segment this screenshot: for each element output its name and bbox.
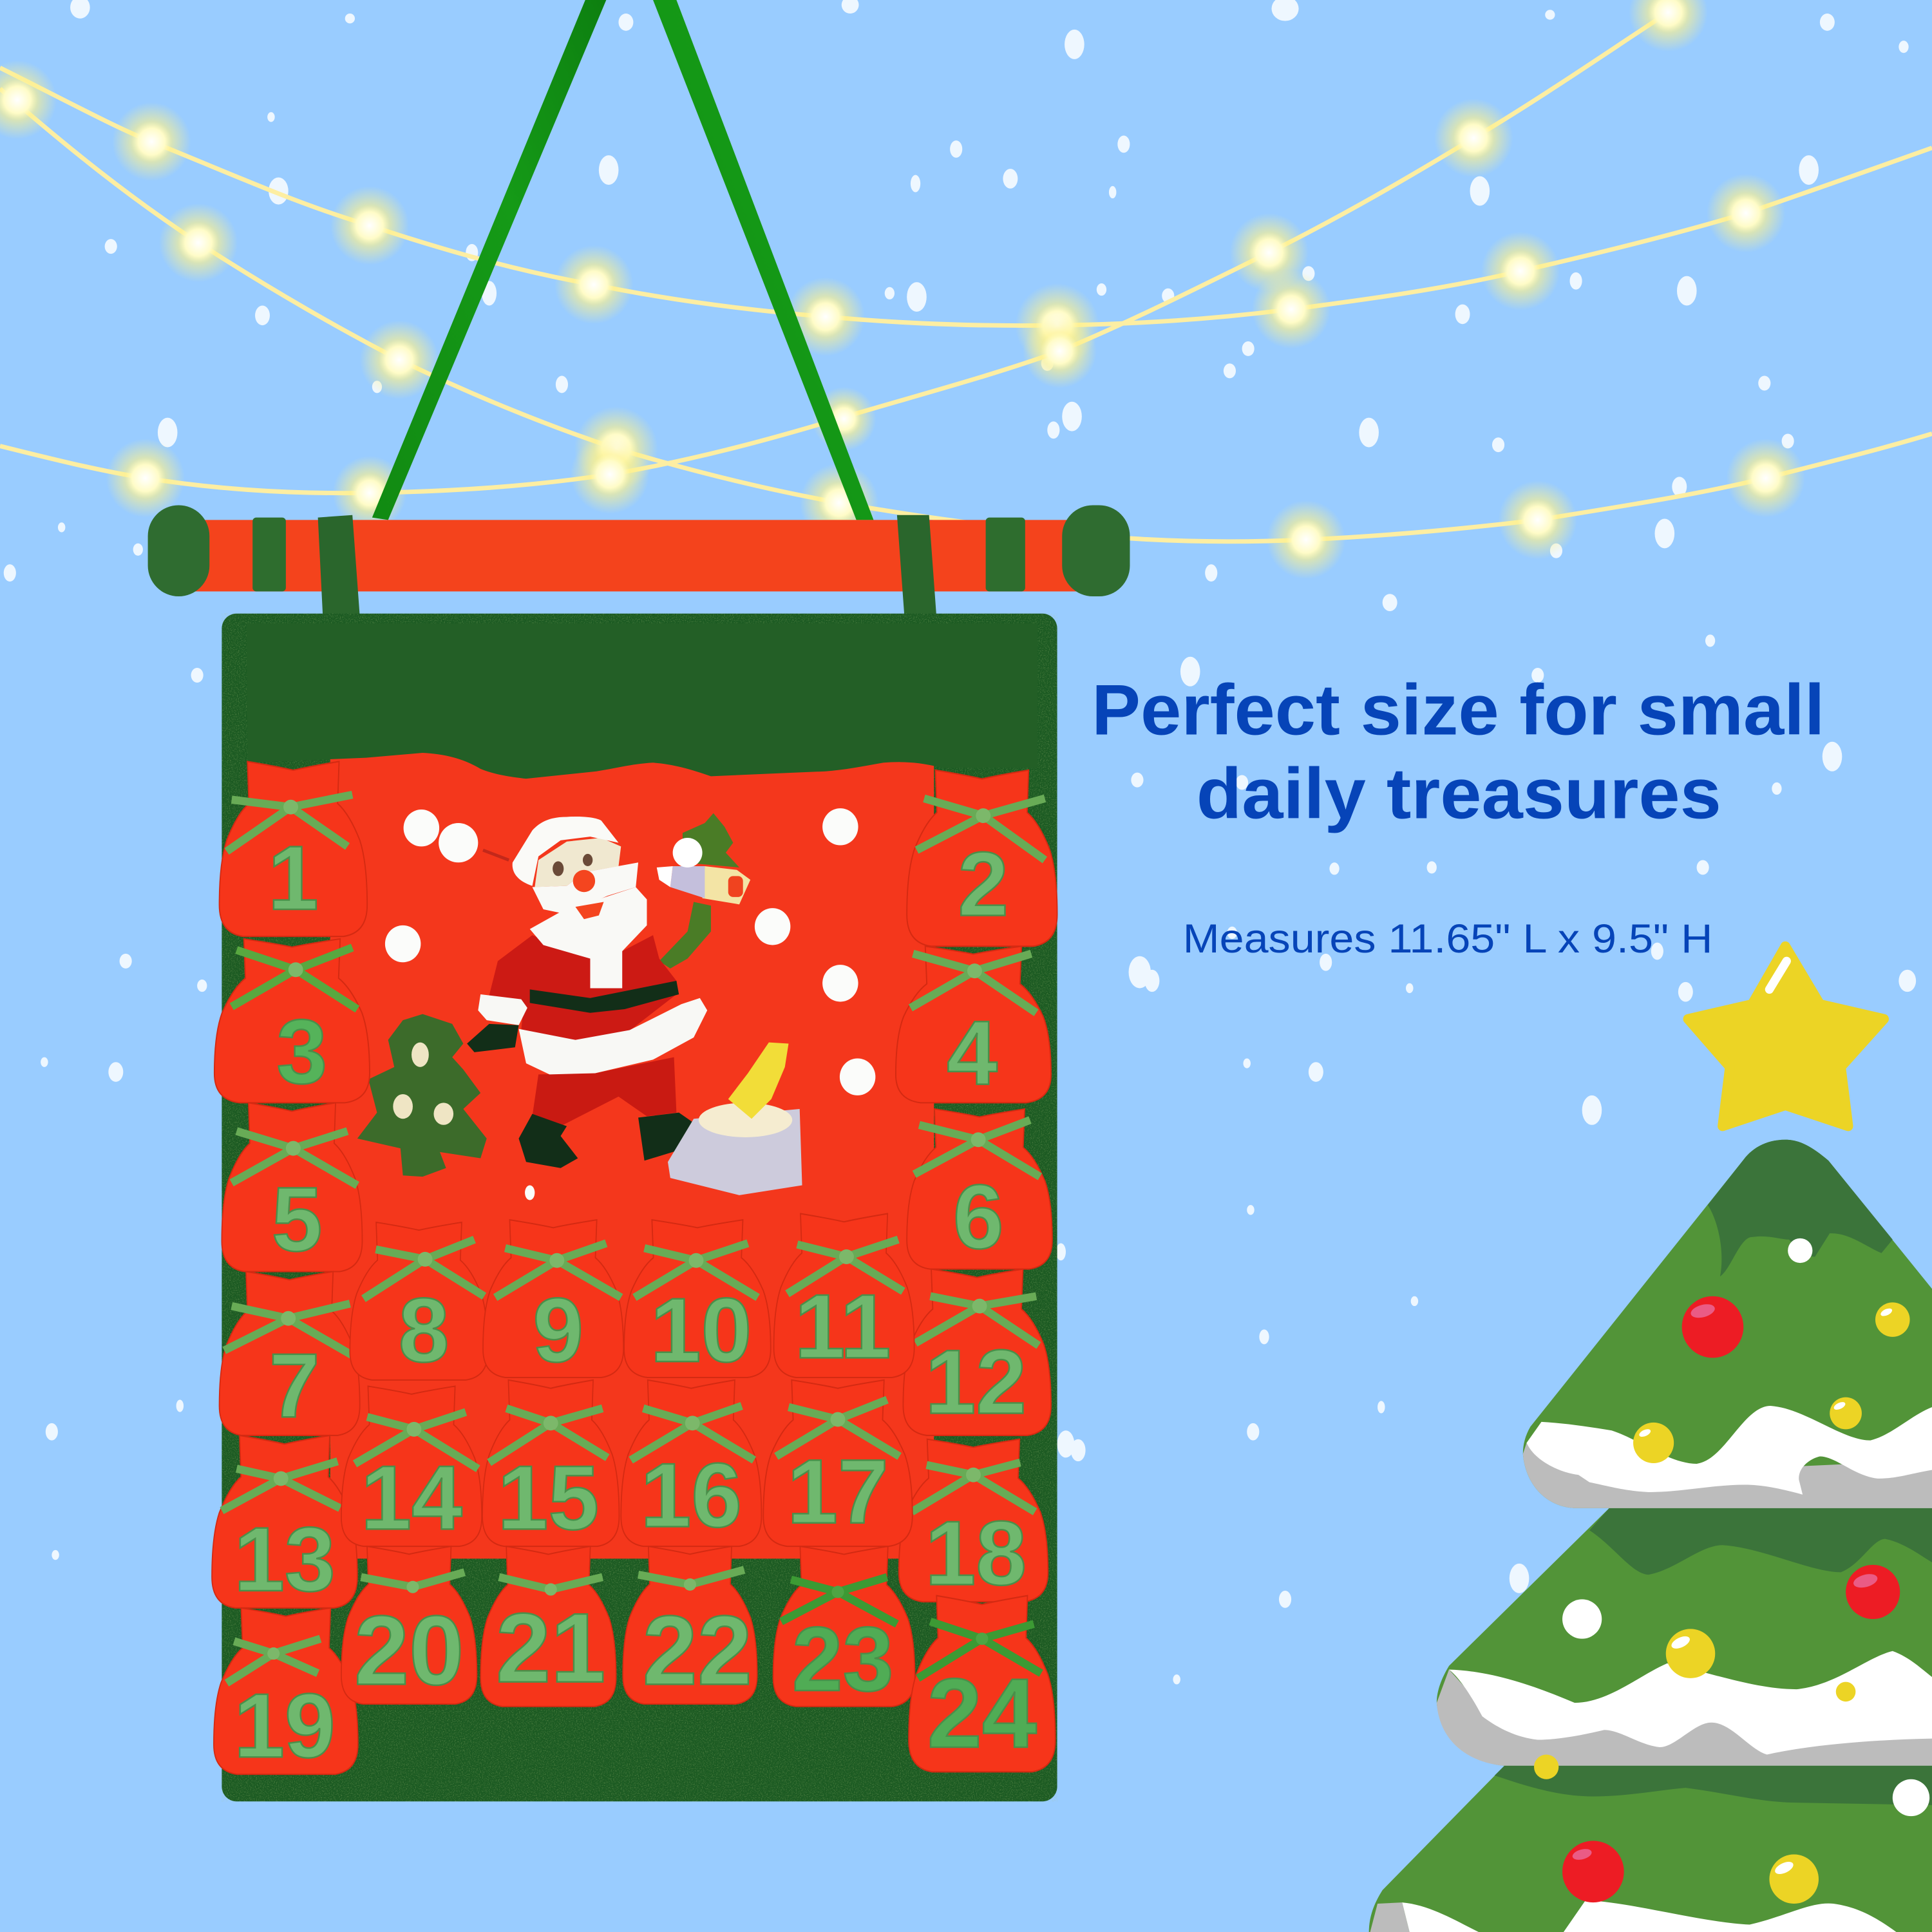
bag 8: 8 bbox=[399, 1280, 450, 1381]
bag 8 bbox=[350, 1222, 488, 1381]
bag 18 bbox=[899, 1439, 1048, 1604]
bag 20 bbox=[341, 1546, 477, 1705]
bag 15 bbox=[482, 1380, 619, 1549]
belt bbox=[530, 981, 679, 1013]
bag 22: 22 bbox=[643, 1595, 752, 1705]
bag 9: 9 bbox=[533, 1280, 583, 1381]
bag 5 bbox=[222, 1103, 362, 1271]
title: Perfect size for small bbox=[1092, 670, 1825, 750]
thin arm line bbox=[483, 850, 509, 860]
bag 19: 19 bbox=[234, 1675, 336, 1777]
green holly bbox=[683, 813, 739, 867]
bag 21 bbox=[480, 1546, 616, 1707]
bag 4: 4 bbox=[947, 1003, 998, 1104]
mug bbox=[657, 838, 750, 904]
bag 2 bbox=[907, 770, 1057, 946]
hat bbox=[513, 817, 618, 886]
bag 13: 13 bbox=[234, 1509, 336, 1611]
felt calendar panel bbox=[222, 515, 1057, 1801]
string lights: wires bbox=[0, 12, 1932, 542]
felt candle bbox=[668, 1043, 802, 1195]
bag 15: 15 bbox=[498, 1447, 599, 1549]
ornaments bbox=[1534, 1238, 1929, 1904]
star bbox=[1688, 946, 1884, 1126]
red backing bbox=[330, 746, 934, 1558]
coat bbox=[488, 935, 676, 1041]
felt christmas tree bbox=[357, 1014, 487, 1177]
hanging rod bbox=[148, 505, 1130, 596]
bag 17 bbox=[763, 1380, 913, 1546]
bag 13 bbox=[212, 1435, 357, 1611]
string lights: glowing bulbs bbox=[0, 0, 1805, 579]
bag 7 bbox=[220, 1271, 360, 1437]
middle tier bbox=[1437, 1508, 1932, 1766]
bag 19 bbox=[214, 1608, 358, 1777]
mitt bbox=[467, 1024, 518, 1052]
bag 11: 11 bbox=[795, 1276, 891, 1378]
bag 12: 12 bbox=[925, 1332, 1027, 1434]
christmas tree bbox=[1369, 1140, 1932, 1932]
bag 22 bbox=[623, 1546, 757, 1705]
hanging ribbon bbox=[372, 0, 874, 520]
green sleeve bbox=[659, 902, 711, 969]
title bbox=[1092, 670, 1825, 833]
title: daily treasures bbox=[1197, 753, 1721, 833]
legs bbox=[533, 1057, 676, 1126]
measurements text: Measures 11.65" L x 9.5" H bbox=[1183, 916, 1712, 961]
bag 14: 14 bbox=[361, 1447, 462, 1549]
bag 14 bbox=[341, 1386, 482, 1549]
bag 20: 20 bbox=[354, 1595, 464, 1705]
boots bbox=[518, 1114, 578, 1168]
felt texture bbox=[222, 614, 1057, 1801]
bag 24 bbox=[909, 1596, 1056, 1772]
bag 17: 17 bbox=[787, 1441, 889, 1543]
bag 10: 10 bbox=[650, 1280, 752, 1381]
belly crescent bbox=[518, 998, 707, 1074]
bag 3 bbox=[214, 939, 370, 1103]
bag 23: 23 bbox=[792, 1609, 893, 1710]
bag 5: 5 bbox=[272, 1169, 322, 1271]
bag 21: 21 bbox=[496, 1593, 605, 1703]
bag 11 bbox=[774, 1214, 914, 1378]
bag 24: 24 bbox=[927, 1658, 1037, 1768]
bag 10 bbox=[624, 1220, 771, 1381]
moustache bbox=[533, 862, 638, 914]
bag 18: 18 bbox=[925, 1502, 1027, 1604]
bag 9 bbox=[483, 1220, 623, 1381]
bag 4 bbox=[896, 946, 1051, 1104]
bag 2: 2 bbox=[958, 834, 1009, 936]
top tier bbox=[1523, 1140, 1932, 1508]
bag 1: 1 bbox=[268, 828, 319, 929]
bag 1 bbox=[220, 761, 367, 936]
hanging loops bbox=[318, 515, 936, 616]
bag 6: 6 bbox=[953, 1166, 1004, 1268]
scalloped header band bbox=[247, 623, 1037, 779]
santa bbox=[467, 813, 750, 1168]
beard and coat trim bbox=[530, 887, 647, 988]
bag 23 bbox=[773, 1546, 915, 1710]
bottom tier bbox=[1369, 1766, 1932, 1932]
face bbox=[535, 838, 621, 887]
bag 7: 7 bbox=[269, 1335, 320, 1437]
felt snow dots bbox=[385, 808, 875, 1200]
bag 3: 3 bbox=[276, 1001, 327, 1103]
bag 12 bbox=[903, 1269, 1051, 1435]
cuff bbox=[478, 994, 527, 1025]
bag 16: 16 bbox=[641, 1445, 742, 1547]
bag 6 bbox=[907, 1109, 1052, 1269]
bag 16 bbox=[621, 1380, 761, 1547]
